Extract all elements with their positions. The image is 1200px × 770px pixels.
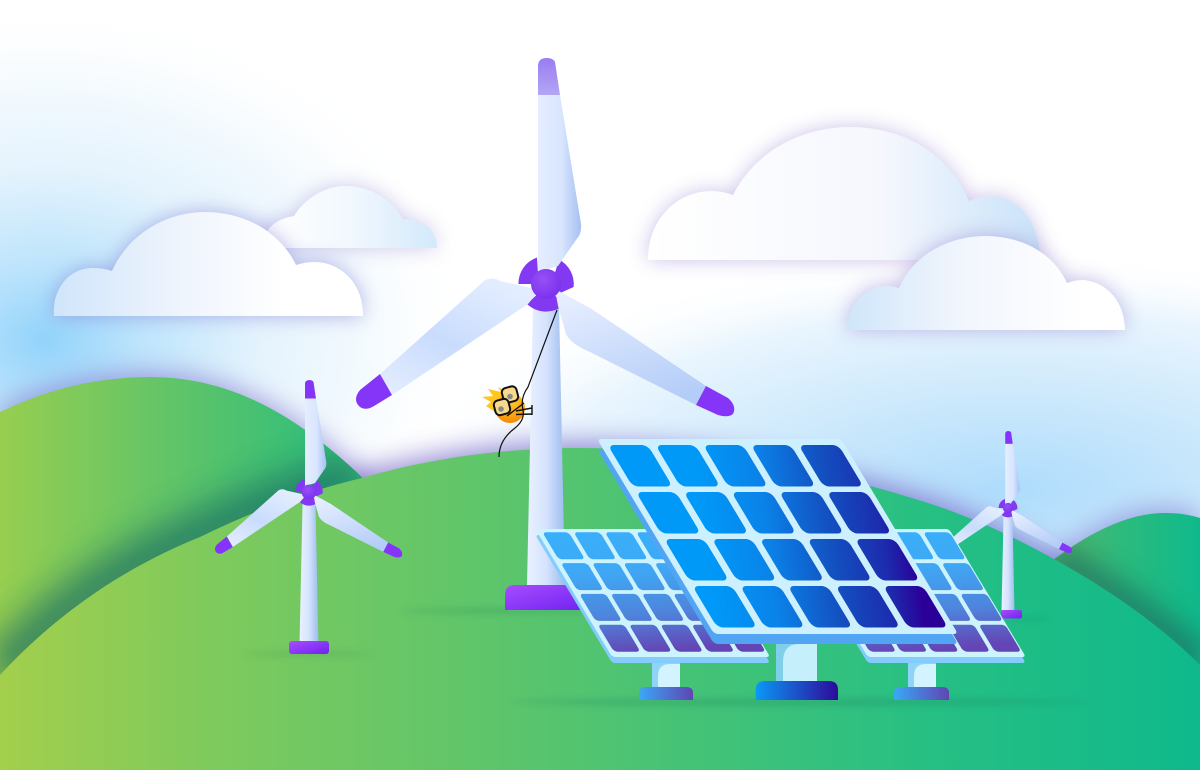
cloud: small back left [258, 186, 437, 248]
cloud: large left [54, 212, 363, 316]
stand [639, 662, 693, 700]
sky background [0, 71, 1200, 559]
solar panel: main front [591, 439, 964, 700]
cloud: large right [648, 127, 1040, 260]
wind turbine: far right [943, 431, 1072, 620]
wind turbine: left [215, 380, 402, 654]
hill: back right [1054, 513, 1200, 665]
stand [894, 662, 949, 700]
hill: central foreground [0, 448, 1200, 770]
ground shadow: left turbine [244, 653, 374, 655]
stand [756, 640, 838, 700]
ground shadow: solar panels [510, 699, 1090, 705]
character: bird on a rope [482, 310, 557, 457]
hill: back left [0, 377, 362, 675]
panel board [532, 529, 774, 663]
cloud: front right [847, 236, 1125, 330]
solar panel: back right [787, 529, 1029, 700]
ground shadow: large turbine [400, 608, 600, 614]
wind turbine: large centre [356, 58, 734, 610]
panel board [591, 439, 964, 644]
panel board [787, 529, 1029, 663]
solar panel: back left [532, 529, 774, 700]
